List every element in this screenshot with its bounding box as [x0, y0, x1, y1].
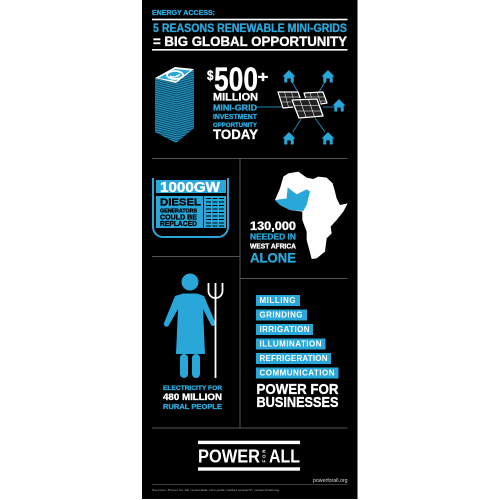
- bar: refrigeration: REFRIGERATION: [260, 354, 328, 363]
- icon: house: [322, 70, 334, 82]
- 500: 500: [214, 60, 258, 98]
- bar: irrigation: IRRIGATION: [260, 325, 310, 334]
- icon: house: [322, 132, 334, 144]
- opportunity: OPPORTUNITY: [213, 122, 258, 129]
- logo: power for all: [198, 441, 300, 471]
- logo: power for all: ALL: [269, 446, 300, 466]
- electricity for: ELECTRICITY FOR: [163, 385, 222, 392]
- title top rule: [152, 19, 348, 20]
- 1000GW header: [156, 180, 226, 193]
- mini-grid: MINI-GRID: [213, 102, 257, 112]
- west africa: WEST AFRICA: [250, 242, 297, 250]
- icon: woman: [164, 274, 215, 378]
- today: TODAY: [213, 126, 259, 142]
- kicker: ENERGY ACCESS:: [152, 10, 215, 17]
- power for: POWER FOR: [256, 381, 339, 398]
- bar: communication: COMMUNICATION: [260, 369, 335, 378]
- needed in: NEEDED IN: [250, 232, 296, 242]
- icon: house: [283, 70, 296, 82]
- businesses: BUSINESSES: [256, 394, 338, 411]
- million: MILLION: [213, 92, 258, 104]
- panel: power for businesses: [256, 295, 339, 411]
- investment figure: [207, 60, 268, 142]
- footnote: Sources: Power for All, renewable mini-grids market research, powerforall.org: [152, 488, 280, 492]
- plus: +: [258, 69, 268, 86]
- panel: africa map: [250, 172, 348, 266]
- icon: pitchfork: [208, 283, 222, 378]
- alone: ALONE: [250, 250, 296, 266]
- replaced: REPLACED: [160, 221, 197, 228]
- solar panels: [278, 92, 327, 118]
- background panel: [142, 0, 358, 499]
- icon: house: [333, 99, 346, 112]
- bar: grinding: GRINDING: [260, 311, 302, 320]
- panel: rural woman: [163, 274, 222, 411]
- website: powerforall.org: [313, 478, 348, 484]
- generator frame: [153, 178, 228, 237]
- title line two: = BIG GLOBAL OPPORTUNITY: [153, 33, 348, 49]
- title bottom rule: [152, 49, 348, 51]
- diesel: DIESEL: [160, 198, 201, 208]
- could be: COULD BE: [160, 214, 197, 222]
- title line one: 5 REASONS RENEWABLE MINI-GRIDS: [153, 23, 347, 35]
- generators: GENERATORS: [160, 208, 197, 214]
- 480 million: 480 MILLION: [163, 392, 222, 402]
- dollar sign: $: [207, 67, 214, 83]
- 1000GW: 1000GW: [160, 180, 220, 196]
- vent grille: [204, 196, 226, 228]
- icon: stack of money: [155, 67, 194, 143]
- rural people: RURAL PEOPLE: [163, 404, 222, 411]
- map of africa: [275, 172, 348, 259]
- logo: power for all: POWER: [198, 446, 260, 466]
- label plate: [156, 196, 203, 228]
- title block: [152, 10, 348, 51]
- diagram: solar mini-grid: [257, 70, 346, 144]
- bar: milling: MILLING: [260, 296, 296, 305]
- investment: INVESTMENT: [213, 114, 258, 121]
- logo: power for all: FOR: [262, 449, 266, 462]
- 130,000: 130,000: [250, 221, 296, 233]
- connector lines: [257, 82, 334, 132]
- bar: illumination: ILLUMINATION: [260, 340, 322, 349]
- panel: diesel generator: [153, 178, 228, 237]
- icon: house: [283, 132, 296, 144]
